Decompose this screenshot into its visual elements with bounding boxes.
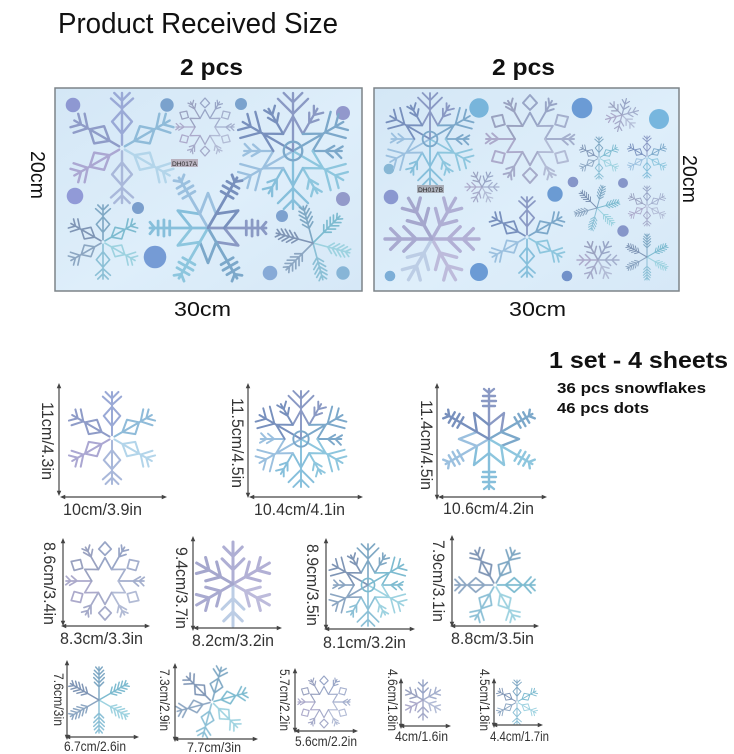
dimension: sheet A height: 20cm <box>26 151 48 199</box>
snowflake size 8.2cm: 8.2cm/3.2in <box>192 631 274 650</box>
label: DH017B: DH017B <box>418 187 443 194</box>
snowflake size 10.6cm: 11.4cm/4.5in <box>417 400 436 490</box>
heading: set size: 1 set - 4 sheets <box>549 347 728 373</box>
snowflake size 7.7cm: 7.3cm/2.9in <box>157 669 172 731</box>
snowflake size 7.7cm <box>157 658 255 754</box>
dots: sheet B <box>384 98 669 281</box>
snowflake size 5.6cm <box>277 669 357 749</box>
snowflake size 10.6cm <box>417 386 544 518</box>
text: dot count: 46 pcs dots <box>557 400 649 417</box>
snowflake size 10cm <box>38 386 164 519</box>
snowflake size 10.6cm: 10.6cm/4.2in <box>443 499 534 518</box>
snowflake size 5.6cm: 5.6cm/2.2in <box>295 734 357 749</box>
snowflake size 8.3cm: 8.3cm/3.3in <box>60 629 143 648</box>
snowflake size 4cm <box>385 669 448 744</box>
snowflake size 5.6cm: 5.7cm/2.2in <box>277 669 292 731</box>
snowflake size 6.7cm: 7.6cm/3in <box>51 673 66 726</box>
snowflake size 8.3cm: 8.6cm/3.4in <box>40 542 59 625</box>
snowflake size 8.8cm: 7.9cm/3.1in <box>429 540 448 622</box>
snowflake size 6.7cm <box>51 663 136 754</box>
snowflake size 6.7cm: 6.7cm/2.6in <box>64 739 126 754</box>
snowflake size 8.1cm: 8.1cm/3.2in <box>323 633 406 652</box>
snowflake size 4.4cm <box>477 669 549 744</box>
snowflake size 8.2cm: 9.4cm/3.7in <box>172 547 191 629</box>
snowflake size 8.8cm <box>429 531 548 648</box>
snowflake size 10cm: 11cm/4.3in <box>38 402 57 480</box>
snowflake size 4cm: 4.6cm/1.8in <box>385 669 400 731</box>
dimension: sheet A width: 30cm <box>174 299 231 321</box>
snowflake size 4cm: 4cm/1.6in <box>395 729 448 744</box>
snowflake size 4.4cm: 4.5cm/1.8in <box>477 669 492 731</box>
heading: right sheet quantity: 2 pcs <box>492 54 555 80</box>
snowflake size 10cm: 10cm/3.9in <box>63 500 142 519</box>
snowflake size 8.8cm: 8.8cm/3.5in <box>451 629 534 648</box>
dots: sheet A <box>66 98 350 280</box>
snowflakes: sheet B <box>368 93 669 303</box>
snowflake size 10.4cm: 10.4cm/4.1in <box>254 500 345 519</box>
snowflake size 4.4cm: 4.4cm/1.7in <box>490 729 549 744</box>
snowflake size 8.3cm <box>40 541 150 648</box>
snowflake size 8.1cm: 8.9cm/3.5in <box>303 544 322 626</box>
heading: left sheet quantity: 2 pcs <box>180 54 243 80</box>
snowflake size 10.4cm <box>228 386 360 519</box>
snowflake size 8.1cm <box>303 541 414 652</box>
label: DH017A: DH017A <box>172 161 198 168</box>
title: Product Received Size <box>58 8 338 40</box>
panel: sheet A <box>55 88 362 291</box>
dimension: sheet B height: 20cm <box>678 155 700 203</box>
panel: sheet B <box>368 88 679 303</box>
dimension: sheet B width: 30cm <box>509 299 566 321</box>
set summary <box>549 347 728 417</box>
snowflake size 10.4cm: 11.5cm/4.5in <box>228 398 247 488</box>
snowflake size 8.2cm <box>172 539 279 650</box>
snowflakes: sheet A <box>67 93 358 289</box>
text: snowflake count: 36 pcs snowflakes <box>557 380 706 397</box>
